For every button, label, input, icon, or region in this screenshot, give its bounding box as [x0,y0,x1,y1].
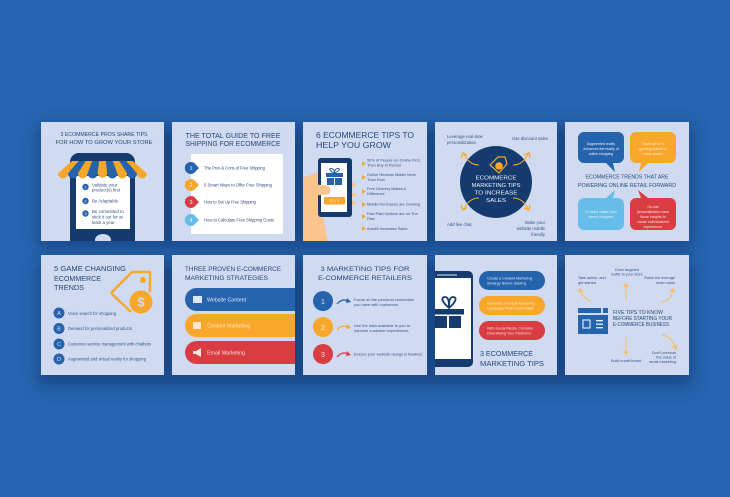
panel: ecommerce trends [565,122,689,241]
icon: price tag [490,157,507,173]
heading [472,176,521,204]
list: shipping topics: How to Set Up Free Shipping [204,200,257,204]
step 1: Focus on the personal connection [354,297,414,302]
bubble: light blue: direct) shoppers [588,215,614,219]
icon: web page [578,308,608,334]
pill: tip 2: Campaign That's Automated [487,306,533,310]
list: tips: Be Adaptable [92,198,119,204]
heading [186,131,281,148]
labels: personalization [447,140,477,145]
heading: THREE PROVEN E-COMMERCE [185,266,281,273]
labels: Add live chat [447,222,472,227]
panel: total guide to free shipping [172,122,295,241]
pill: tip 1: Strategy Before Starting [487,282,526,286]
pill: tip 2 [479,296,545,315]
bubble: red: personalization uses [637,210,669,214]
labels: friendly [531,232,546,237]
list: tips: Fast Paid Options are on The [367,211,418,216]
list: trends [54,308,151,364]
bar: email marketing: Email Marketing [207,350,245,356]
labels [578,268,677,364]
bar: website content: Website Content [207,298,247,304]
pill: tip 3 [479,321,545,340]
heading: ECOMMERCE TRENDS THAT ARE [586,174,669,180]
panel: ecommerce marketing tips [435,122,557,241]
heading: MARKETING STRATEGIES [185,275,268,282]
bubble: orange: There will be a [642,142,664,146]
heading [318,266,413,282]
heading [480,351,544,366]
heading: MARKETING TIPS [472,183,521,189]
labels: Raise the average [644,276,675,280]
pill: tip 1 [479,271,545,290]
bubble: red: experiences [644,225,663,229]
heading [185,266,281,280]
heading: SALES [486,198,506,204]
white list card [191,154,283,234]
list: tips: Online Reviews Matter More [367,172,416,177]
step 3 [313,344,422,364]
list: shipping topics: How to Calculate Free Shipping Costs [204,218,274,222]
list: tips: Autofill Increases Sales [367,226,407,231]
list: trends: C [57,342,61,348]
bar: content marketing: Content Marketing [207,324,250,330]
list: trends: B [57,326,61,332]
heading: BEFORE STARTING YOUR [613,316,672,322]
step 2: improve customer experiences [354,328,408,333]
heading: TO INCREASE [474,190,518,196]
heading [578,174,676,189]
panel: three proven strategies [172,255,295,375]
heading: MARKETING TIPS [480,359,544,368]
heading [613,310,672,328]
bubble: orange: growing market of [639,147,667,151]
bubble: blue: online shopping [589,152,613,156]
list: tips: Than Ever [367,177,386,182]
heading: 3 MARKETING TIPS FOR [320,266,410,273]
list: shipping topics: 3 [189,200,193,206]
list: tips: Mobile Purchases are Growing [367,202,420,206]
labels: website mobile [517,226,546,231]
bar: content marketing [185,314,295,337]
list: shipping topics: 2 [189,183,193,189]
list: tips: stick it out for at [92,214,124,220]
heading: E-COMMERCE RETAILERS [318,275,413,282]
panel: 5 game changing trends [41,255,164,375]
bubble: red: On-site [647,205,659,209]
heading: TRENDS [54,283,84,292]
list: tips: Free Delivery Makes A [367,186,407,191]
heading: POWERING ONLINE RETAIL FORWARD [578,183,676,189]
heading: E-COMMERCE BUSINESS [613,322,670,328]
panel: 6 ecommerce tips [303,122,427,241]
list: tips: product(s) first [92,188,121,192]
labels: Don't overlook [652,351,676,355]
list: shipping topics [185,162,274,226]
list: tips: Validate your [92,182,118,188]
panel: 3 marketing tips for retailers [303,255,427,375]
bar: website content [185,288,295,311]
list: tips: Rise [367,216,375,221]
labels: get started [578,281,596,285]
heading [316,132,414,148]
icon: price tag with dollar: $ [137,294,145,310]
panel: 3 ecommerce pros share tips [41,122,164,246]
heading: 3 ECOMMERCE PROS SHARE TIPS [60,132,148,138]
bubble: orange [630,132,676,172]
list: trends: Demand for personalized products [68,326,132,331]
pill: tip 1: Create a Content Marketing [487,276,532,280]
bubble: red: those insights to [640,215,666,219]
list: trends: A [57,311,61,317]
bubble: blue: enhances the reality of [583,147,619,151]
panel: five tips before starting [565,255,689,375]
dark circle [460,146,532,218]
list: tips: least a year [92,220,115,225]
list: tips: Be committed to [92,209,124,214]
step 2: 2 [321,325,325,332]
list: tips: 3 [84,211,87,216]
labels: the value of [656,356,677,360]
pill: tip 2: Generate an Email Marketing [487,302,535,306]
bar: email marketing [185,341,295,364]
list: trends: Customer-service management with chatbots [68,342,151,346]
heading: FIVE TIPS TO KNOW [613,310,663,316]
icon: gift [326,168,343,185]
labels: Make your [525,220,546,225]
arrows [461,153,530,210]
bubble: red: create individualized [637,220,669,224]
labels: Build a well brand [611,359,641,363]
labels: Take action, and [578,276,606,280]
step 3: Ensure your website design is flawless [354,352,422,356]
list: tips: 1 [84,184,87,190]
heading: 6 ECOMMERCE TIPS TO [316,130,414,140]
labels: Leverage real-time [447,134,483,139]
arrows [578,284,677,354]
bubble: orange: voice search [643,152,663,156]
list: tips [362,158,421,231]
list: tips: Difference [367,191,385,196]
labels: Drive targeted [615,268,639,272]
labels: traffic to your store [611,272,643,276]
bubble: blue: Augmented reality [587,142,615,146]
list: trends: D [57,357,61,363]
step 2 [313,317,411,337]
pill: tip 3: With Social Media, Consider [487,326,534,330]
step 2: Use the data available to you to [354,323,411,328]
list: trends: Augmented and virtual reality for shopping [68,356,147,362]
list: tips: Then Buy in Person [367,162,401,168]
labels [447,134,548,237]
list: tips: 50% of People Go Online First, [367,158,421,162]
heading: HELP YOU GROW [316,140,392,150]
list: shipping topics: 5 Smart Ways to Offer Free Shipping [204,182,273,188]
heading: THE TOTAL GUIDE TO FREE [186,131,281,140]
button: buy [324,197,345,204]
step 1: 1 [321,299,325,306]
heading: 5 GAME CHANGING [54,264,126,273]
heading: 3 ECOMMERCE [480,349,533,358]
bubble: light blue: AI helps shape (and [585,210,617,214]
heading: ECOMMERCE [54,274,101,283]
step 3: 3 [321,352,325,359]
illustration: hand holding phone: BUY [329,199,340,205]
heading: FOR HOW TO GROW YOUR STORE [56,140,153,146]
icon: phone storefront [58,153,147,246]
heading: SHIPPING FOR ECOMMERCE [186,139,281,148]
bubble: light blue [578,190,624,230]
list: shipping topics: 1 [189,166,193,172]
heading [54,264,126,292]
step 1: you have with customers [354,302,398,307]
labels: Use discount sales [512,136,548,141]
labels: order value [656,281,675,285]
step 1 [313,291,414,311]
illustration: phone with gift [435,271,473,367]
heading: ECOMMERCE [476,176,517,182]
pill: tip 3: Diversifying Your Platforms [487,332,531,336]
bubble: red [630,190,676,230]
panel: 3 ecommerce marketing tips [430,255,557,375]
list: tips [82,182,124,225]
heading [56,132,152,144]
list: shipping topics: The Pros & Cons of Free Shipping [204,166,266,170]
list: shipping topics: 4 [189,218,193,224]
labels: email marketing [649,360,676,364]
list: tips: 2 [84,198,87,204]
list: trends: Voice search for shopping [68,311,117,316]
bubble: blue [578,132,624,172]
